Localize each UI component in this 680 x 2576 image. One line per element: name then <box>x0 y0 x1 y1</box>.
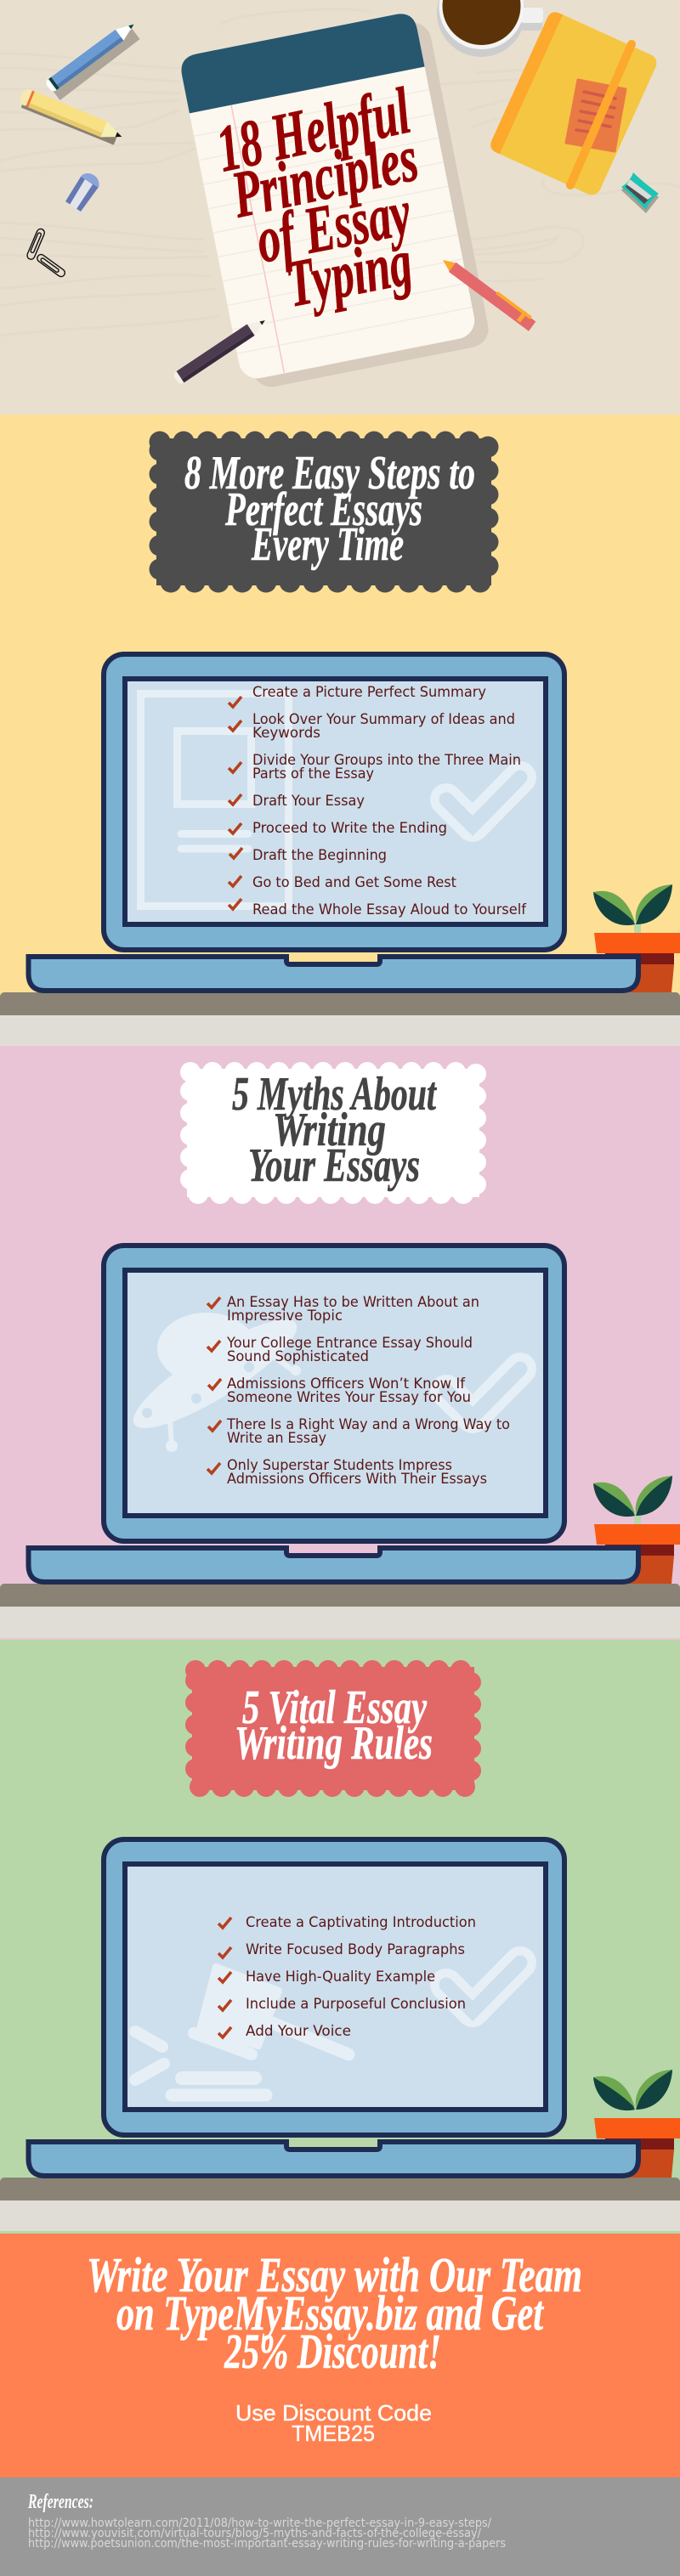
checklist: Have High-Quality Example <box>246 1969 435 1985</box>
icon: eraser <box>65 173 99 212</box>
laptop with plant <box>29 1839 680 2178</box>
checklist <box>229 684 527 918</box>
checklist: Keywords <box>252 725 320 741</box>
laptop with plant <box>29 654 680 992</box>
heading badge: 5 Vital Essay <box>242 1681 428 1734</box>
heading badge <box>187 1068 479 1197</box>
screen watermark: check <box>446 1369 520 1417</box>
icon: coffee cup <box>437 0 543 57</box>
reference links <box>28 2517 506 2551</box>
title: Typing <box>280 224 418 321</box>
checklist: Admissions Officers Won’t Know If <box>227 1376 466 1392</box>
reference links: http://www.howtolearn.com/2011/08/how-to-write-the-perfect-essay-in-9-easy-steps/ <box>28 2517 491 2530</box>
checklist: Admissions Officers With Their Essays <box>227 1471 487 1487</box>
panel: 5 myths <box>0 1046 680 1641</box>
reference links: http://www.poetsunion.com/the-most-important-essay-writing-rules-for-writing-a-papers <box>28 2537 506 2551</box>
checklist: Write an Essay <box>227 1430 326 1446</box>
discount code: Use Discount Code <box>235 2400 432 2426</box>
reference links: http://www.youvisit.com/virtual-tours/blog/5-myths-and-facts-of-the-college-essay/ <box>28 2527 481 2540</box>
checklist: Draft Your Essay <box>252 793 365 809</box>
panel: references <box>0 2477 680 2576</box>
icon: yellow notebook <box>488 9 660 198</box>
icon: blue pencil <box>44 19 138 95</box>
checklist: Go to Bed and Get Some Rest <box>252 874 457 890</box>
icon: paperclips <box>26 228 66 278</box>
discount code: TMEB25 <box>292 2421 375 2446</box>
panel: desk header <box>0 0 680 415</box>
table <box>0 1584 680 1638</box>
screen watermark: check <box>446 777 520 826</box>
heading badge: Writing Rules <box>235 1717 433 1770</box>
icon: sharpener <box>621 172 659 213</box>
references heading: References: <box>27 2491 94 2513</box>
panel: notepad <box>178 11 491 390</box>
checklist: Create a Captivating Introduction <box>246 1914 476 1930</box>
callout heading: 25% Discount! <box>224 2324 441 2379</box>
checklist: An Essay Has to be Written About an <box>227 1294 479 1310</box>
panel: 5 vital rules <box>0 1640 680 2234</box>
checklist <box>218 1914 476 2039</box>
heading badge <box>192 1667 474 1790</box>
heading badge <box>156 438 491 585</box>
heading badge: Your Essays <box>248 1139 420 1192</box>
checklist: Your College Entrance Essay Should <box>226 1335 473 1351</box>
callout heading <box>87 2247 582 2379</box>
screen watermark: gavel <box>135 1967 348 2095</box>
checklist <box>207 1294 510 1487</box>
table <box>0 2178 680 2231</box>
title: 18 Helpful <box>210 73 416 186</box>
heading badge: Perfect Essays <box>224 483 422 536</box>
title: of Essay <box>251 175 416 277</box>
icon: red pen <box>439 254 537 331</box>
checklist: Parts of the Essay <box>252 765 374 782</box>
panel: 8 more easy steps <box>0 415 680 1047</box>
checklist: Add Your Voice <box>246 2023 351 2039</box>
checklist: Impressive Topic <box>227 1308 343 1324</box>
discount code <box>235 2400 432 2446</box>
heading badge: Writing <box>273 1104 386 1156</box>
checklist: Proceed to Write the Ending <box>252 820 447 836</box>
checklist: Write Focused Body Paragraphs <box>246 1941 465 1957</box>
checklist: Draft the Beginning <box>252 847 387 863</box>
checklist: Read the Whole Essay Aloud to Yourself <box>252 901 527 918</box>
title <box>210 73 424 321</box>
icon: dark pencil <box>173 314 269 386</box>
screen watermark: spaceship <box>122 1303 309 1452</box>
screen watermark: check <box>446 1963 520 2011</box>
checklist: Sound Sophisticated <box>227 1348 369 1364</box>
checklist: Divide Your Groups into the Three Main <box>252 752 521 768</box>
checklist: Create a Picture Perfect Summary <box>252 684 486 700</box>
heading badge: 8 More Easy Steps to <box>184 447 475 500</box>
checklist: Only Superstar Students Impress <box>227 1457 452 1473</box>
checklist: There Is a Right Way and a Wrong Way to <box>226 1416 510 1432</box>
heading badge: Every Time <box>251 518 404 571</box>
screen watermark: document <box>141 693 289 906</box>
checklist: Someone Writes Your Essay for You <box>227 1389 471 1405</box>
heading badge: 5 Myths About <box>232 1068 437 1121</box>
panel: discount call to action <box>0 2234 680 2477</box>
checklist: Include a Purposeful Conclusion <box>246 1996 466 2012</box>
title: Principles <box>225 121 424 232</box>
laptop with plant <box>29 1246 680 1584</box>
table <box>0 992 680 1046</box>
icon: yellow pencil <box>18 88 125 144</box>
checklist: Look Over Your Summary of Ideas and <box>252 711 515 727</box>
